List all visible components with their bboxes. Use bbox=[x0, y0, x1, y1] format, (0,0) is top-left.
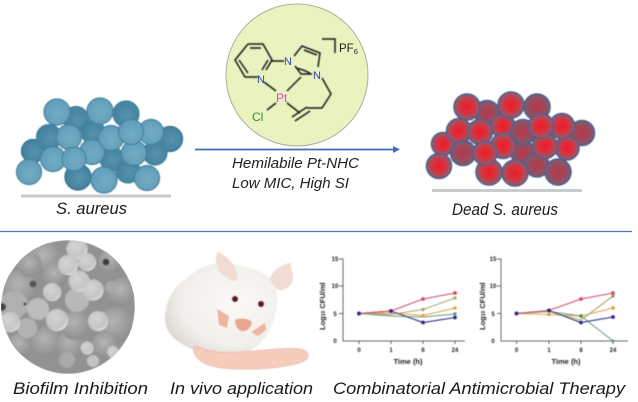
biofilm micrograph bbox=[0, 238, 136, 374]
mouse photo bbox=[165, 252, 308, 369]
body bbox=[165, 263, 277, 355]
compound circle with Pt-NHC structure: N bbox=[313, 70, 321, 82]
surface under dead S. aureus bbox=[432, 189, 582, 192]
text: Low MIC, High SI: Low MIC, High SI bbox=[232, 175, 349, 192]
tail bbox=[194, 346, 308, 369]
line chart 2: 0 bbox=[491, 339, 495, 345]
compound circle with Pt-NHC structure: 6 bbox=[354, 47, 358, 56]
line chart 2: 24 bbox=[610, 348, 617, 354]
line chart 2: 15 bbox=[490, 257, 497, 263]
line chart 2: 5 bbox=[491, 312, 495, 318]
line chart 1: 0 bbox=[333, 339, 337, 345]
text: Hemilabile Pt-NHC: Hemilabile Pt-NHC bbox=[232, 155, 359, 172]
line chart 2: 0 bbox=[515, 348, 519, 354]
compound circle with Pt-NHC structure bbox=[226, 4, 368, 146]
nose bbox=[235, 319, 252, 331]
label: Combinatorial Antimicrobial Therapy: Combinatorial Antimicrobial Therapy bbox=[333, 380, 627, 398]
label: Biofilm Inhibition: Biofilm Inhibition bbox=[13, 380, 148, 398]
left ear bbox=[216, 252, 237, 281]
line chart 1: Log10 CFU/ml bbox=[318, 282, 327, 330]
compound circle with Pt-NHC structure: PF bbox=[339, 43, 354, 55]
line chart 1: 1 bbox=[389, 348, 393, 354]
line chart 2 bbox=[478, 257, 628, 366]
compound circle with Pt-NHC structure: N bbox=[284, 56, 292, 68]
label: S. aureus: S. aureus bbox=[56, 200, 127, 218]
cluster: dead S. aureus bacteria bbox=[426, 92, 594, 186]
reaction arrow bbox=[195, 146, 400, 153]
compound circle with Pt-NHC structure: Pt bbox=[276, 91, 288, 105]
compound circle with Pt-NHC structure: N bbox=[257, 74, 265, 86]
line chart 2: 1 bbox=[547, 348, 551, 354]
line chart 1 bbox=[318, 257, 465, 366]
label: Dead S. aureus: Dead S. aureus bbox=[452, 201, 558, 219]
compound circle with Pt-NHC structure: Cl bbox=[252, 110, 263, 124]
cluster: S. aureus bacteria bbox=[16, 98, 182, 193]
line chart 1: 10 bbox=[332, 284, 339, 290]
right ear bbox=[270, 263, 293, 290]
surface under S. aureus bbox=[21, 194, 171, 198]
label: In vivo application: In vivo application bbox=[170, 380, 313, 398]
line chart 2: 10 bbox=[490, 284, 497, 290]
paws bbox=[217, 309, 266, 336]
divider line bbox=[0, 230, 632, 232]
line chart 1: 6 bbox=[421, 348, 425, 354]
line chart 2: 8 bbox=[579, 348, 583, 354]
eyes bbox=[232, 296, 238, 302]
line chart 2: Time (h) bbox=[551, 357, 581, 366]
line chart 1: Time (h) bbox=[393, 357, 423, 366]
line chart 1: 24 bbox=[452, 348, 459, 354]
line chart 1: 5 bbox=[333, 312, 337, 318]
line chart 1: 0 bbox=[357, 348, 361, 354]
line chart 1: 15 bbox=[332, 257, 339, 263]
line chart 2: Log10 CFU/ml bbox=[478, 282, 487, 330]
